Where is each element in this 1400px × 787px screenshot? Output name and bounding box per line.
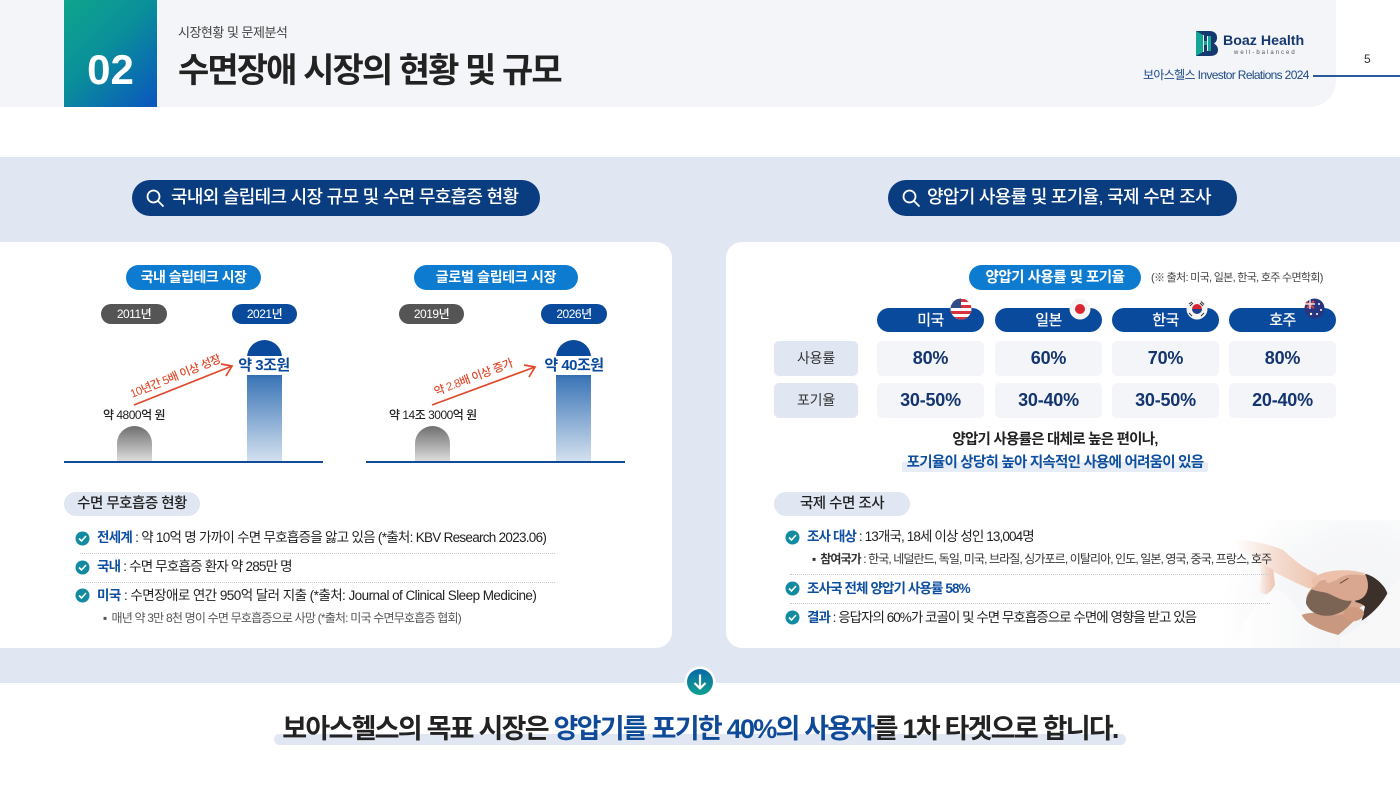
dropout value Korea xyxy=(1112,383,1219,418)
pill: domestic market: 국내 슬립테크 시장 xyxy=(141,269,246,285)
text us: 미국 : 수면장애로 연간 950억 달러 지출 (*출처: Journal of Clinical Sleep Medicine) xyxy=(97,588,536,603)
section kicker: 시장현황 및 문제분석 xyxy=(178,25,287,40)
icon: Japan flag xyxy=(1070,298,1090,320)
list: survey xyxy=(786,529,1272,625)
text target: 조사 대상 : 13개국, 18세 이상 성인 13,004명 xyxy=(807,529,1034,544)
bullet domestic xyxy=(76,560,90,574)
dropout value Australia: 20-40% xyxy=(1252,390,1313,410)
bar 2021 xyxy=(247,340,282,461)
takeaway line 2: 포기율이 상당히 높아 지속적인 사용에 어려움이 있음 xyxy=(907,455,1203,471)
icon: US flag xyxy=(950,298,972,320)
pill: global market xyxy=(414,265,578,290)
pill: usage xyxy=(969,265,1141,290)
text domestic: 국내 : 수면 무호흡증 환자 약 285만 명 xyxy=(97,559,292,574)
year 2011 xyxy=(101,304,167,324)
row label: dropout: 포기율 xyxy=(797,392,835,408)
bar 2011 xyxy=(117,426,152,461)
usage value Australia: 80% xyxy=(1265,348,1300,368)
text us detail: ▪ 매년 약 3만 8천 명이 수면 무호흡증으로 사망 (*출처: 미국 수면무호흡증 협회) xyxy=(103,611,461,625)
icon: search left xyxy=(146,190,164,208)
dropout value Australia xyxy=(1229,383,1336,418)
list: sleep apnea xyxy=(76,530,546,625)
section number badge xyxy=(64,0,157,107)
value: 40조원: 약 40조원 xyxy=(544,357,604,374)
year 2011: 2011년 xyxy=(117,307,151,321)
country header USA: 미국 xyxy=(917,312,944,329)
icon: Australia flag xyxy=(1304,298,1324,318)
text countries: ▪ 참여국가 : 한국, 네덜란드, 독일, 미국, 브라질, 싱가포르, 이탈리아, 인도, 일본, 영국, 중국, 프랑스, 호주 xyxy=(812,552,1271,566)
dropout value Japan: 30-40% xyxy=(1018,390,1079,410)
baseline left xyxy=(64,461,323,463)
arrow left xyxy=(134,363,234,406)
value: 3조원: 약 3조원 xyxy=(238,357,290,374)
page number: 5 xyxy=(1364,52,1370,66)
investor relations label: 보아스헬스 Investor Relations 2024 xyxy=(1143,68,1309,82)
highlight bar xyxy=(902,462,1208,472)
panel: market size xyxy=(0,242,672,648)
icon: down arrow xyxy=(684,666,716,695)
bullet result xyxy=(786,610,800,624)
text world: 전세계 : 약 10억 명 가까이 수면 무호흡증을 앓고 있음 (*출처: KBV Research 2023.06) xyxy=(97,530,546,545)
takeaway line 1: 양압기 사용률은 대체로 높은 편이나, xyxy=(952,432,1158,448)
subheading: sleep apnea status: 수면 무호흡증 현황 xyxy=(77,496,187,512)
pill: domestic market xyxy=(126,265,261,290)
photo: man lying with hand on forehead xyxy=(1242,530,1400,648)
bullet us xyxy=(76,588,90,602)
header line xyxy=(1313,75,1400,76)
country header Australia: 호주 xyxy=(1269,312,1296,329)
pill: global market: 글로벌 슬립테크 시장 xyxy=(436,269,556,285)
bar 2019 xyxy=(415,426,450,461)
country header Japan xyxy=(995,308,1102,332)
conclusion highlight xyxy=(274,734,1126,745)
value: 3조원 xyxy=(229,356,299,375)
panel: cpap usage xyxy=(726,242,1400,648)
year 2019: 2019년 xyxy=(414,307,449,321)
year 2019 xyxy=(399,304,464,324)
usage value Japan xyxy=(995,341,1102,376)
blue background panel xyxy=(0,157,1400,683)
row label: usage: 사용률 xyxy=(797,350,835,366)
bullet 58 xyxy=(786,582,800,596)
pill: usage: 양압기 사용률 및 포기율 xyxy=(986,270,1124,286)
header band xyxy=(0,0,1336,107)
usage value USA xyxy=(877,341,984,376)
arrow label left: 10년간 5배 이상 성장 xyxy=(129,353,223,401)
logo: Boaz Health: Boaz Health xyxy=(1223,33,1304,49)
subheading: international survey: 국제 수면 조사 xyxy=(800,496,884,512)
usage value Australia xyxy=(1229,341,1336,376)
year 2026: 2026년 xyxy=(556,307,592,321)
section number badge: 02 xyxy=(87,46,134,93)
country header USA xyxy=(877,308,984,332)
usage value Japan: 60% xyxy=(1031,348,1066,368)
country header Korea xyxy=(1112,308,1219,332)
year 2021: 2021년 xyxy=(247,307,282,321)
conclusion: 보아스헬스의 목표 시장은 양압기를 포기한 40%의 사용자를 1차 타겟으로 합니다. xyxy=(282,714,1118,744)
text result: 결과 : 응답자의 60%가 코골이 및 수면 무호흡증으로 수면에 영향을 받고 있음 xyxy=(807,610,1196,625)
country header Korea: 한국 xyxy=(1152,312,1179,329)
baseline right xyxy=(366,461,625,463)
dropout value Korea: 30-50% xyxy=(1135,390,1196,410)
year 2021 xyxy=(232,304,297,324)
arrow label right: 약 2.8배 이상 증가 xyxy=(433,358,515,399)
icon: Korea flag xyxy=(1186,298,1208,320)
heading pill: left xyxy=(132,180,540,216)
usage value Korea: 70% xyxy=(1148,348,1183,368)
logo: Boaz Health: well-balanced xyxy=(1234,50,1297,56)
year 2026 xyxy=(541,304,607,324)
value: 14조 3000억 원: 약 14조 3000억 원 xyxy=(389,408,477,422)
main title: 수면장애 시장의 현황 및 규모 xyxy=(178,52,561,90)
row label: dropout xyxy=(774,383,858,418)
bullet world xyxy=(76,532,90,546)
row label: usage xyxy=(774,341,858,376)
usage value Korea xyxy=(1112,341,1219,376)
bar 2026 xyxy=(556,340,591,461)
subheading: sleep apnea status xyxy=(64,492,200,516)
heading pill: right xyxy=(888,180,1237,216)
usage value USA: 80% xyxy=(913,348,948,368)
dropout value USA: 30-50% xyxy=(900,390,961,410)
source note: (※ 출처: 미국, 일본, 한국, 호주 수면학회) xyxy=(1151,272,1323,284)
subheading: international survey xyxy=(774,492,910,516)
country header Australia xyxy=(1229,308,1336,332)
icon: search right xyxy=(902,190,920,208)
text 58: 조사국 전체 양압기 사용률 58% xyxy=(807,581,970,596)
value: 4800억 원: 약 4800억 원 xyxy=(103,408,165,422)
bullet target xyxy=(786,530,800,544)
heading pill: left: 국내외 슬립테크 시장 규모 및 수면 무호흡증 현황 xyxy=(171,187,518,207)
arrow right xyxy=(432,364,536,406)
dropout value USA xyxy=(877,383,984,418)
dropout value Japan xyxy=(995,383,1102,418)
country header Japan: 일본 xyxy=(1035,312,1062,329)
heading pill: right: 양압기 사용률 및 포기율, 국제 수면 조사 xyxy=(927,187,1211,207)
logo: Boaz Health xyxy=(1196,31,1304,56)
